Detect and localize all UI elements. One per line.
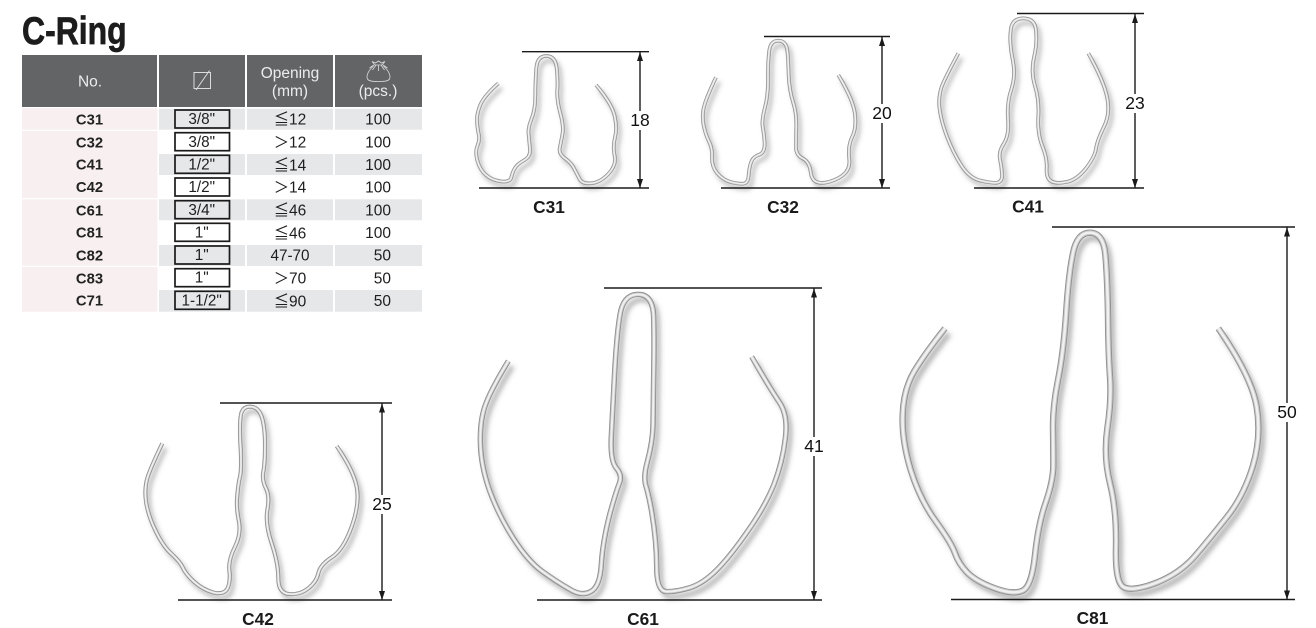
row C61: ≦46 — [274, 198, 306, 220]
row C32: 100 — [365, 134, 391, 152]
row C71: 50 — [374, 293, 391, 310]
row C71: 1-1/2" — [182, 292, 222, 310]
wire C61 — [480, 294, 790, 599]
row C81: 100 — [365, 225, 391, 242]
row C41 — [76, 154, 391, 176]
row C82: C82 — [76, 248, 103, 264]
header: pieces: (pcs.) — [359, 83, 397, 100]
dimension C31 — [479, 52, 651, 188]
row C31: C31 — [76, 112, 103, 128]
row C41: 1/2" — [188, 156, 215, 174]
dimension C41: 23 — [1125, 93, 1145, 113]
row C81: ≦46 — [274, 222, 306, 244]
dimension C42 — [178, 403, 393, 600]
first column pink bands — [22, 108, 158, 312]
wire C81 — [903, 233, 1262, 598]
icon: square size with diagonal — [194, 70, 210, 90]
row C82 — [76, 246, 391, 264]
label C41: C41 — [1012, 196, 1044, 216]
row C81: C81 — [76, 226, 103, 242]
dimension C31: 18 — [630, 110, 650, 130]
table: C-Ring specifications — [22, 55, 422, 312]
row C41: 100 — [365, 157, 391, 174]
dimension C41 — [974, 14, 1146, 188]
row C42: 1/2" — [188, 179, 215, 196]
panel: ring C61 — [480, 288, 825, 628]
panel: ring C32 — [703, 36, 893, 217]
row C32 — [76, 130, 391, 152]
wire C31 — [476, 56, 619, 188]
title: C-Ring — [22, 10, 127, 53]
row C42: 100 — [365, 180, 391, 196]
row C82: 47-70 — [270, 248, 310, 264]
row C82: 1" — [195, 247, 209, 264]
row C61: C61 — [76, 204, 103, 220]
row C81: 1" — [195, 224, 209, 242]
header: Opening (mm) — [261, 65, 319, 100]
dimension C32: 20 — [872, 103, 892, 123]
wire C32 — [703, 41, 859, 188]
header: Opening (mm): Opening — [261, 65, 319, 82]
header: No.: No. — [78, 74, 102, 90]
panel: ring C41 — [939, 14, 1146, 216]
dimension C42: 25 — [372, 494, 392, 514]
row C82: 50 — [374, 248, 391, 264]
wire C41 — [939, 18, 1112, 188]
dimension C61: 41 — [804, 436, 824, 456]
row C83: 1" — [195, 270, 209, 286]
label C81: C81 — [1077, 608, 1109, 628]
header: Opening (mm): (mm) — [272, 83, 308, 100]
row C71: ≦90 — [274, 290, 307, 312]
row C42: C42 — [76, 180, 103, 196]
row C41: C41 — [76, 158, 103, 174]
label C32: C32 — [767, 197, 799, 217]
panel: ring C81 — [903, 227, 1298, 628]
row C41: ≦14 — [274, 154, 307, 176]
row C83 — [76, 266, 391, 288]
row C31: 3/8" — [188, 111, 215, 128]
panel: ring C42 — [145, 403, 393, 628]
row C71 — [76, 290, 391, 312]
label C31: C31 — [533, 197, 565, 217]
icon: tied bag — [367, 61, 390, 82]
alternate row shading — [159, 109, 422, 312]
row C32: 3/8" — [188, 134, 215, 151]
row C31: 100 — [365, 112, 391, 128]
dimension C81 — [951, 227, 1298, 600]
row C83: ＞70 — [274, 266, 307, 288]
row C83: 50 — [374, 270, 391, 288]
dimension C81: 50 — [1277, 402, 1297, 422]
dimension C32 — [721, 36, 893, 188]
row C42 — [76, 176, 391, 198]
row C32: C32 — [76, 136, 103, 152]
row C31 — [76, 108, 391, 130]
row C81 — [76, 222, 391, 244]
panel: ring C31 — [476, 52, 651, 217]
dimension C61 — [537, 288, 825, 600]
table header — [22, 55, 422, 107]
row C83: C83 — [76, 272, 103, 288]
row C31: ≦12 — [274, 108, 306, 130]
row C61: 3/4" — [188, 202, 215, 219]
row C32: ＞12 — [274, 130, 306, 152]
wire C42 — [145, 407, 361, 599]
row C71: C71 — [76, 294, 103, 310]
row C42: ＞14 — [274, 176, 307, 198]
row C61: 100 — [365, 202, 391, 220]
row C61 — [76, 198, 391, 220]
